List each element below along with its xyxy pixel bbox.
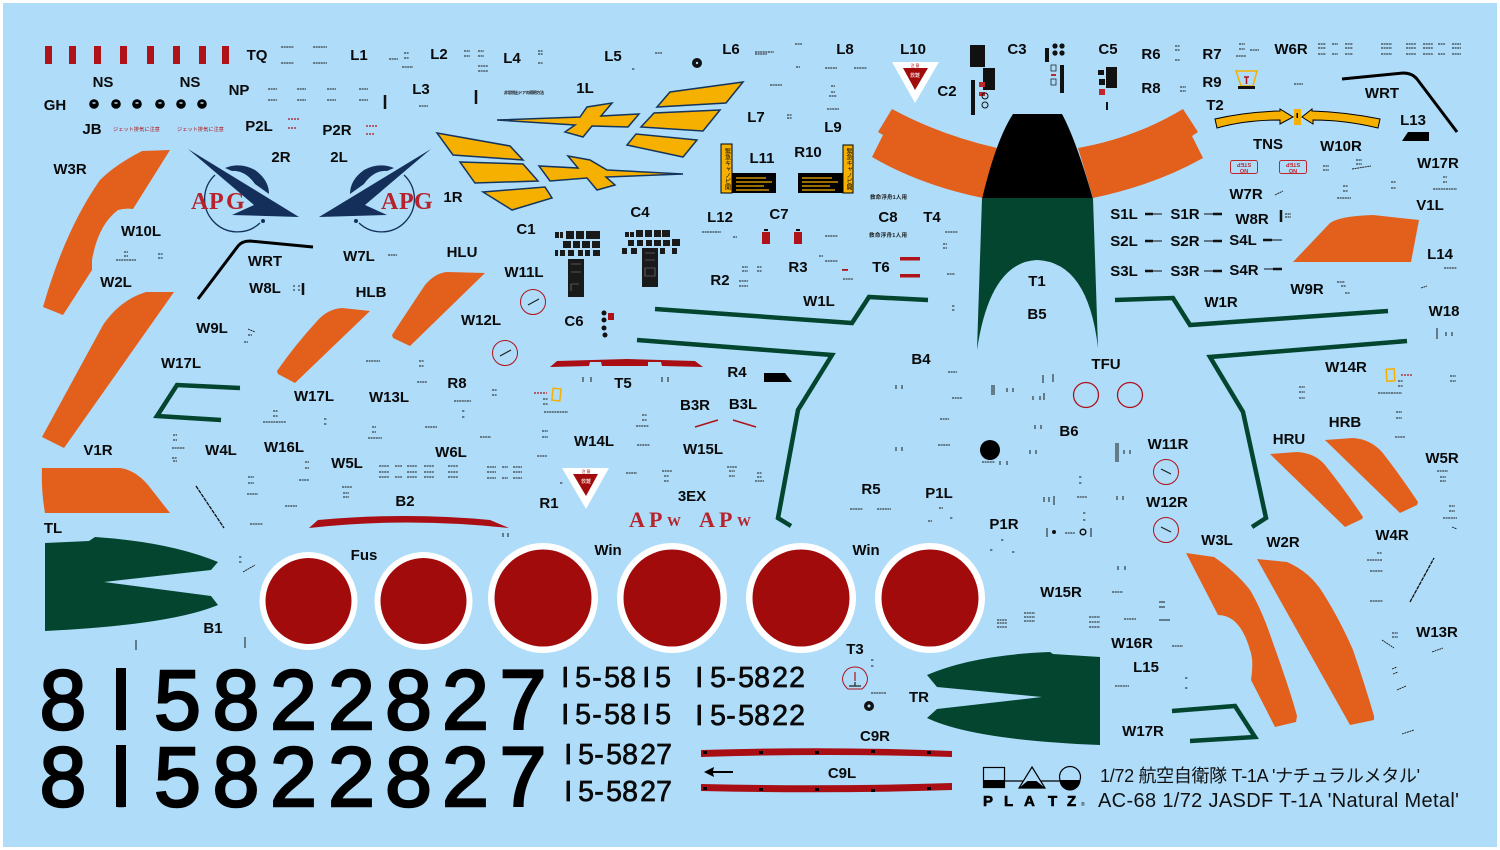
red T6 bars <box>900 257 920 278</box>
part number labels: L2 <box>430 46 448 63</box>
part number labels: R2 <box>710 272 730 289</box>
part number labels: C2 <box>937 83 957 100</box>
part number labels: W12L <box>461 312 501 329</box>
part number labels: R5 <box>861 481 881 498</box>
APW stencil text 3EX: W <box>737 515 751 530</box>
bracket W17R <box>1172 706 1255 741</box>
red B3 lines <box>695 420 756 427</box>
diagonal dotted strips <box>196 486 1434 602</box>
part number labels: L12 <box>707 209 733 226</box>
part number labels: P1R <box>989 516 1019 533</box>
C8 liferaft text: 救命浮舟1人用 <box>869 231 907 239</box>
part number labels: W15R <box>1040 584 1082 601</box>
logo 2L: arrow with APG <box>319 149 433 232</box>
part number labels: L1 <box>350 47 368 64</box>
part number labels: R8 <box>447 375 467 392</box>
red tiny dashes <box>288 119 1413 393</box>
part number labels: T3 <box>846 641 864 658</box>
part number labels: C5 <box>1098 41 1118 58</box>
logo square <box>984 768 1004 788</box>
part number labels: T2 <box>1206 97 1224 114</box>
part number labels: 1R <box>443 189 463 206</box>
part number labels: WRT <box>1365 85 1399 102</box>
S-series dashes <box>1153 214 1282 271</box>
red C7 blocks <box>762 229 848 271</box>
part number labels: R10 <box>794 144 822 161</box>
part number labels: 2L <box>330 149 348 166</box>
part number labels: W1R <box>1204 294 1238 311</box>
part number labels: NS <box>93 74 113 91</box>
panel HLU <box>392 272 485 346</box>
black part L13 <box>1402 132 1429 141</box>
part number labels: W8L <box>249 280 281 297</box>
red aircraft marks <box>492 290 1178 689</box>
part number labels: P2R <box>322 122 352 139</box>
logo 2R: arrow with APG: APG <box>191 189 245 215</box>
part number labels: L3 <box>412 81 430 98</box>
part number labels: 1L <box>576 80 594 97</box>
green tail TR <box>927 652 1100 745</box>
part number labels: HLU <box>447 244 477 261</box>
serial number decals: 15-5822 <box>691 700 805 732</box>
black part R4 <box>764 373 792 382</box>
panel V1L <box>1293 215 1419 262</box>
tail assembly T1 <box>872 109 1203 350</box>
green fin <box>977 198 1098 350</box>
part number labels: W6R <box>1274 41 1308 58</box>
arrow <box>704 767 733 777</box>
panel HRB <box>1325 438 1418 513</box>
part number labels: W5R <box>1425 450 1459 467</box>
rescue canopy marking R10 <box>798 145 853 193</box>
part number labels: L4 <box>503 50 521 67</box>
line W1R <box>1115 298 1388 325</box>
small round dial T3 <box>864 701 874 711</box>
part number labels: L8 <box>836 41 854 58</box>
logo circle <box>1060 766 1080 788</box>
part number labels: TQ <box>247 47 268 64</box>
part number labels: S2L <box>1110 233 1138 250</box>
part number labels: W10L <box>121 223 161 240</box>
product title English: AC-68 1/72 JASDF T-1A 'Natural Metal' <box>1098 790 1459 812</box>
yellow stripes 1L <box>497 82 743 157</box>
part number labels: B1 <box>203 620 223 637</box>
part number labels: T5 <box>614 375 632 392</box>
part number labels: Win <box>852 542 880 559</box>
part number labels: W1L <box>803 293 835 310</box>
part number labels: S4R <box>1229 262 1259 279</box>
part number labels: W17R <box>1417 155 1459 172</box>
orange wing panels, right side <box>1186 215 1419 727</box>
large number decals row 1 <box>42 668 544 732</box>
part number labels: W14R <box>1325 359 1367 376</box>
C8 liferaft text: 救命浮舟1人用 <box>870 193 907 201</box>
line long left <box>637 340 832 526</box>
part number labels: W14L <box>574 433 614 450</box>
white triangle emblem R1: 注 意 <box>581 468 591 474</box>
orange band right <box>1078 109 1203 198</box>
part number labels: HRU <box>1273 431 1305 448</box>
serial number decals: 15-5822 <box>691 662 805 694</box>
part number labels: R7 <box>1202 46 1222 63</box>
part number labels: S4L <box>1229 232 1257 249</box>
part number labels: W18 <box>1429 303 1459 320</box>
red strip decals <box>45 46 229 64</box>
APW stencil text 3EX: W <box>667 515 681 530</box>
serial "1" glyphs drawn as plain bars <box>558 665 707 803</box>
white triangle emblem R1 <box>562 468 609 509</box>
part number labels: S1L <box>1110 206 1138 223</box>
part number labels: W5L <box>331 455 363 472</box>
part number labels: R6 <box>1141 46 1161 63</box>
part number labels: 2R <box>271 149 291 166</box>
panel W2L <box>42 292 174 448</box>
panel W2R <box>1257 559 1374 725</box>
green trim lines <box>157 297 1407 741</box>
large number decals row 2 <box>42 745 544 808</box>
part number labels: WRT <box>248 253 282 270</box>
orange wing panels, left side <box>42 150 485 513</box>
large number decals row 2: 1 <box>98 730 144 824</box>
part C2 small panels <box>970 45 995 115</box>
large number decals row 1: 1 <box>98 653 144 747</box>
JB jet exhaust warning text <box>113 125 224 133</box>
C8 liferaft text: 非常脱出ドアの開閉方法 <box>504 89 544 95</box>
serial number decals: 15-5827 <box>560 739 672 771</box>
part number labels: Fus <box>351 547 377 564</box>
part number labels: C3 <box>1007 41 1027 58</box>
part number labels: TR <box>909 689 929 706</box>
part number labels: B3L <box>729 396 757 413</box>
part C3 dots and column <box>1045 43 1065 93</box>
rescue canopy marking L11 <box>721 144 776 193</box>
yellow small frames <box>552 369 1395 401</box>
PLATZ logo: ® <box>1081 801 1085 808</box>
APW stencil text 3EX: AP <box>629 507 662 532</box>
part number labels: TFU <box>1091 356 1121 373</box>
vertical black bars <box>303 90 476 295</box>
part number labels: P1L <box>925 485 953 502</box>
part number labels: W4L <box>205 442 237 459</box>
part number labels: B2 <box>395 493 415 510</box>
part number labels: B4 <box>911 351 931 368</box>
GH gauge dots <box>89 99 207 109</box>
part number labels: B6 <box>1059 423 1079 440</box>
part number labels: W9L <box>196 320 228 337</box>
part number labels: NS <box>180 74 200 91</box>
part number labels: W12R <box>1146 494 1188 511</box>
line long right <box>1210 341 1407 527</box>
APW stencil text 3EX <box>629 507 751 532</box>
part number labels: C9L <box>828 765 856 782</box>
part number labels: W9R <box>1290 281 1324 298</box>
panel W3R <box>43 150 170 315</box>
part number labels: W2L <box>100 274 132 291</box>
part number labels: W4R <box>1375 527 1409 544</box>
logo triangle <box>1019 767 1045 788</box>
part number labels: W11R <box>1148 436 1189 453</box>
white triangle emblem L10: 注 意 <box>910 62 920 68</box>
no-step markings: STEP <box>1285 161 1300 167</box>
instrument panel C1 <box>555 231 600 297</box>
part number labels: TNS <box>1253 136 1283 153</box>
C8 liferaft text <box>504 89 907 239</box>
part number labels: R8 <box>1141 80 1161 97</box>
part number labels: 3EX <box>678 488 706 505</box>
part number labels: R9 <box>1202 74 1222 91</box>
part number labels: Win <box>594 542 622 559</box>
part number labels: JB <box>82 121 102 138</box>
national insignia roundels <box>260 543 985 653</box>
part number labels: B3R <box>680 397 710 414</box>
small aircraft glyphs in rings <box>500 299 1171 686</box>
black dot <box>980 440 1000 460</box>
part number labels: C6 <box>564 313 584 330</box>
part number labels: W16R <box>1111 635 1153 652</box>
PLATZ logo <box>983 766 1085 810</box>
tiny vertical stencil ticks <box>136 328 1452 650</box>
T2 yellow arrows <box>1215 109 1380 128</box>
part number labels: B5 <box>1027 306 1047 323</box>
panel W3L <box>1186 553 1297 727</box>
logo 2R: arrow with APG <box>188 149 299 232</box>
panel V1R <box>42 468 170 513</box>
part number labels: HLB <box>356 284 387 301</box>
logo connector lines <box>1005 780 1060 782</box>
part number labels: L11 <box>749 150 775 167</box>
part number labels: GH <box>44 97 66 114</box>
part number labels: NP <box>229 82 249 99</box>
part number labels: R3 <box>788 259 808 276</box>
part number labels: C4 <box>630 204 650 221</box>
part number labels: W3R <box>53 161 87 178</box>
part C5 panel <box>1098 67 1117 110</box>
part number labels: C7 <box>769 206 789 223</box>
part number labels: W6L <box>435 444 467 461</box>
part number labels: TL <box>44 520 62 537</box>
part number labels: C8 <box>878 209 898 226</box>
part number labels: V1L <box>1416 197 1444 214</box>
part number labels: V1R <box>83 442 113 459</box>
part number labels: L9 <box>824 119 842 136</box>
part number labels: S2R <box>1170 233 1200 250</box>
part number labels: R4 <box>727 364 747 381</box>
part number labels: C1 <box>516 221 536 238</box>
part number labels: W13R <box>1416 624 1458 641</box>
part number labels: W11L <box>504 264 544 281</box>
rescue canopy marking L11: 緊急キャノピ開 <box>724 148 730 191</box>
small ring marker <box>1052 529 1086 535</box>
white triangle emblem L10 <box>892 62 939 103</box>
part number labels: W3L <box>1201 532 1233 549</box>
yellow stripes 1R <box>437 133 683 210</box>
logo 2L: arrow with APG: APG <box>381 189 433 215</box>
part number labels: L7 <box>747 109 765 126</box>
part number labels: W17L <box>294 388 334 405</box>
part number labels: W17R <box>1122 723 1164 740</box>
part number labels: W8R <box>1235 211 1269 228</box>
R9 yellow trapezoid <box>1236 71 1257 89</box>
part number labels: C9R <box>860 728 890 745</box>
JB jet exhaust warning text: ジェット排気に注意 <box>113 125 160 133</box>
part number labels: W15L <box>683 441 723 458</box>
line W1L <box>655 297 928 323</box>
logo wordmark: PLATZ <box>983 793 1076 810</box>
part number labels: W16L <box>264 439 304 456</box>
part number labels: L6 <box>722 41 740 58</box>
part number labels: W13L <box>369 389 409 406</box>
red strips B2 and T5 <box>309 359 703 528</box>
part number labels: S3R <box>1170 263 1200 280</box>
no-step markings: STEP <box>1236 161 1251 167</box>
part number labels: T4 <box>923 209 941 226</box>
black WRT lines <box>198 73 1457 299</box>
part number labels: L5 <box>604 48 622 65</box>
serial number decals <box>557 662 805 808</box>
green tail TL <box>45 537 218 631</box>
serial number decals: 15-5815 <box>557 699 671 731</box>
part number labels: L14 <box>1427 246 1454 263</box>
panel HRU <box>1270 452 1363 527</box>
part number labels: W7R <box>1229 186 1263 203</box>
part number labels: W2R <box>1266 534 1300 551</box>
black anti-glare <box>982 114 1093 199</box>
part number labels: T1 <box>1028 273 1046 290</box>
large number decals row 1: 85822827 <box>40 653 546 747</box>
small round dial L5 <box>692 58 702 68</box>
part number labels: R1 <box>539 495 559 512</box>
red TFU rings <box>1074 382 1142 408</box>
serial number decals: 15-5827 <box>560 776 672 808</box>
product title Japanese: 1/72 航空自衛隊 T-1A 'ナチュラルメタル' <box>1100 766 1420 786</box>
part number labels: L15 <box>1133 659 1159 676</box>
no-step markings: ON <box>1240 169 1248 175</box>
part number labels: P2L <box>245 118 273 135</box>
part number labels: S3L <box>1110 263 1138 280</box>
part number labels: HRB <box>1329 414 1361 431</box>
part C6 dots <box>602 310 614 338</box>
part number labels: S1R <box>1170 206 1200 223</box>
JB jet exhaust warning text: ジェット排気に注意 <box>177 125 224 133</box>
tiny stencil markings <box>116 44 1461 734</box>
serial number decals: 15-5815 <box>557 662 671 694</box>
part number labels: L10 <box>900 41 926 58</box>
part number labels: L13 <box>1400 112 1426 129</box>
orange band left <box>872 109 997 198</box>
C9 red strips with arrow <box>701 748 952 792</box>
panel HLB <box>277 308 370 383</box>
part number labels: W17L <box>161 355 201 372</box>
APW stencil text 3EX: AP <box>699 507 732 532</box>
white triangle emblem L10: 救難 <box>910 72 920 79</box>
part number labels: T6 <box>872 259 890 276</box>
white triangle emblem R1: 救難 <box>581 478 591 485</box>
part number labels: W7L <box>343 248 375 265</box>
bracket W17L <box>157 385 240 420</box>
instrument panel C4 <box>622 230 680 287</box>
large number decals row 2: 85822827 <box>40 730 546 824</box>
no-step markings: ON <box>1289 169 1297 175</box>
no-step markings <box>1230 160 1306 175</box>
part number labels: W10R <box>1320 138 1362 155</box>
S-series bars <box>1145 210 1282 271</box>
rescue canopy marking R10: 緊急キャノピ開 <box>845 148 852 191</box>
